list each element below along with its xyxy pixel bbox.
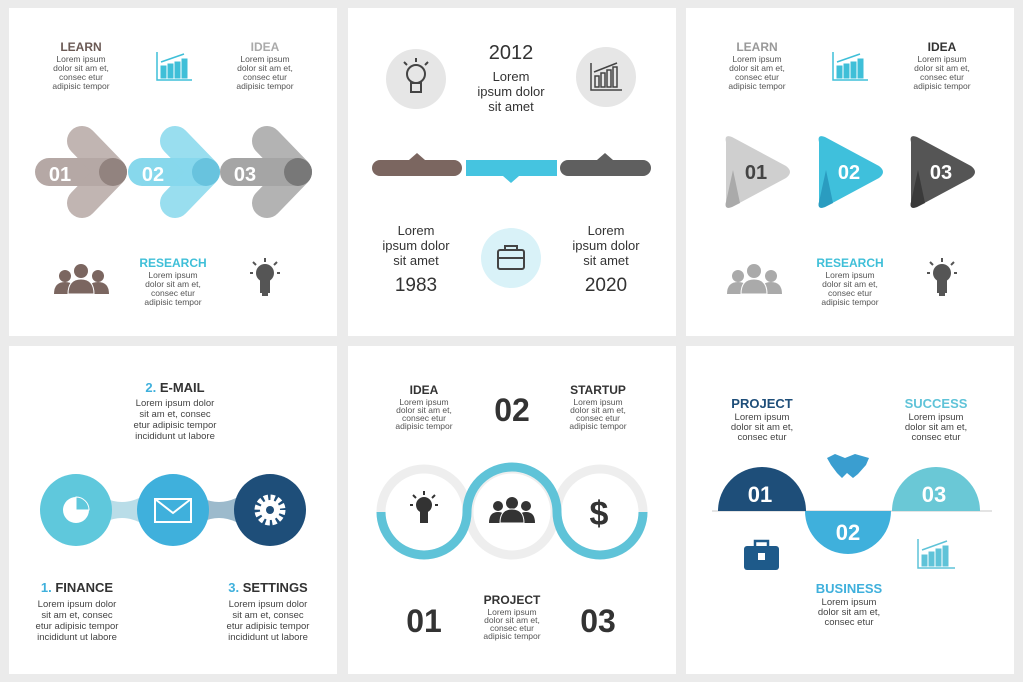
timeline bars <box>372 153 651 183</box>
text: learn: LEARN <box>736 40 778 54</box>
text: settings: sit am et, consec <box>232 610 304 621</box>
semicircle 02 <box>805 511 891 554</box>
text: idea: IDEA <box>410 383 439 397</box>
text: 1983: Lorem <box>398 223 434 238</box>
text: business: BUSINESS <box>816 581 883 596</box>
panel: timeline <box>348 8 676 336</box>
text: idea: IDEA <box>928 40 957 54</box>
text: idea: dolor sit am et, <box>396 405 452 415</box>
icon: handshake <box>827 454 869 478</box>
icon: bulb <box>410 491 438 523</box>
text: business: dolor sit am et, <box>818 607 880 618</box>
text: 1983: ipsum dolor <box>382 238 450 253</box>
text: email: 2. E-MAIL <box>145 380 205 395</box>
text: 2020: ipsum dolor <box>572 238 640 253</box>
text: learn <box>728 40 786 91</box>
icon: chart <box>157 52 192 80</box>
text: idea: consec etur <box>243 72 287 82</box>
text: 2020: Lorem <box>588 223 624 238</box>
text: startup: consec etur <box>576 413 620 423</box>
text: finance <box>36 580 118 643</box>
semicircle 03 <box>892 467 980 511</box>
text: learn: Lorem ipsum <box>56 54 106 64</box>
semicircle 02: 02 <box>836 520 860 545</box>
number 02: 02 <box>494 392 530 428</box>
text: project: dolor sit am et, <box>484 615 540 625</box>
triangle 02: 02 <box>838 162 860 184</box>
text: research <box>816 256 884 307</box>
text: startup: Lorem ipsum <box>573 397 623 407</box>
text: business: Lorem ipsum <box>822 597 877 608</box>
text: 2020 <box>572 223 640 296</box>
text: finance: Lorem ipsum dolor <box>38 599 116 610</box>
arrow 01 <box>35 141 127 203</box>
circle: finance <box>40 474 112 546</box>
semicircle 03: 03 <box>922 482 946 507</box>
text: research: dolor sit am et, <box>145 279 201 289</box>
triangle 01 <box>726 136 790 208</box>
text: email: etur adipisic tempor <box>134 420 216 431</box>
text: project: PROJECT <box>484 593 541 607</box>
text: learn: consec etur <box>735 72 779 82</box>
text: research: Lorem ipsum <box>148 270 198 280</box>
text: learn: adipisic tempor <box>728 81 786 91</box>
text: settings: incididunt ut labore <box>228 632 308 643</box>
text: startup: STARTUP <box>570 383 626 397</box>
text: business <box>816 581 883 628</box>
text: startup: adipisic tempor <box>569 421 627 431</box>
text: settings: Lorem ipsum dolor <box>229 599 307 610</box>
text: finance: incididunt ut labore <box>37 632 117 643</box>
triangle 02 <box>819 136 883 208</box>
text: idea: consec etur <box>402 413 446 423</box>
icon: chart <box>918 539 955 568</box>
baseline <box>712 510 992 512</box>
text: 2012: 2012 <box>489 42 533 64</box>
circle: email <box>137 474 209 546</box>
text: research: Lorem ipsum <box>825 270 875 280</box>
text: research <box>139 256 207 307</box>
number 03: 03 <box>580 603 616 639</box>
semicircle 01 <box>718 467 806 511</box>
icon: people <box>489 497 535 523</box>
text: success <box>905 396 968 443</box>
text: success: consec etur <box>911 432 961 443</box>
text: startup <box>569 383 627 431</box>
text: idea <box>236 40 294 91</box>
text: startup: dolor sit am et, <box>570 405 626 415</box>
text: success: dolor sit am et, <box>905 422 967 433</box>
text: 2012: ipsum dolor <box>477 84 545 99</box>
text: research: adipisic tempor <box>144 297 202 307</box>
text: finance: 1. FINANCE <box>41 580 113 595</box>
text: idea <box>395 383 453 431</box>
panel: arrows 1 <box>9 8 337 336</box>
text: finance: etur adipisic tempor <box>36 621 118 632</box>
text: settings <box>227 580 309 643</box>
text: idea: dolor sit am et, <box>237 63 293 73</box>
text: research: RESEARCH <box>816 256 884 270</box>
text: idea: adipisic tempor <box>913 81 971 91</box>
icon: bulb <box>250 258 280 296</box>
text: project <box>483 593 541 641</box>
connectors <box>105 498 236 522</box>
text: project: Lorem ipsum <box>735 412 790 423</box>
triangle 03: 03 <box>930 162 952 184</box>
text: 1983: 1983 <box>395 275 437 296</box>
icon: bulb <box>927 258 957 296</box>
text: success: Lorem ipsum <box>909 412 964 423</box>
text: settings: 3. SETTINGS <box>228 580 308 595</box>
text: learn: dolor sit am et, <box>729 63 785 73</box>
arrow 03 <box>220 141 312 203</box>
text: 1983: sit amet <box>393 253 439 268</box>
text: learn: consec etur <box>59 72 103 82</box>
text: learn <box>52 40 110 91</box>
panel: semicircles <box>686 346 1014 674</box>
text: idea: dolor sit am et, <box>914 63 970 73</box>
text: 1983 <box>382 223 450 296</box>
icon: chart circle <box>576 47 636 107</box>
arrow 02 <box>128 141 220 203</box>
icon: bulb circle <box>386 49 446 109</box>
text: research: dolor sit am et, <box>822 279 878 289</box>
text: research: consec etur <box>151 288 195 298</box>
rings <box>381 467 643 555</box>
icon: people <box>727 264 782 294</box>
text: research: consec etur <box>828 288 872 298</box>
text: 2020: sit amet <box>583 253 629 268</box>
text: project: consec etur <box>737 432 787 443</box>
text: email: incididunt ut labore <box>135 431 215 442</box>
text: research: RESEARCH <box>139 256 207 270</box>
icon: briefcase circle <box>481 228 541 288</box>
text: idea: IDEA <box>251 40 280 54</box>
text: project: PROJECT <box>731 396 793 411</box>
text: business: consec etur <box>824 617 874 628</box>
text: research: adipisic tempor <box>821 297 879 307</box>
text: project <box>731 396 793 443</box>
icon: briefcase <box>744 541 779 570</box>
arrow 02: 02 <box>142 164 164 186</box>
text: idea: adipisic tempor <box>395 421 453 431</box>
semicircle 01: 01 <box>748 482 772 507</box>
text: 2012: sit amet <box>488 99 534 114</box>
icon: people <box>54 264 109 294</box>
text: learn: Lorem ipsum <box>732 54 782 64</box>
text: learn: dolor sit am et, <box>53 63 109 73</box>
text: learn: adipisic tempor <box>52 81 110 91</box>
triangle 03 <box>911 136 975 208</box>
text: settings: etur adipisic tempor <box>227 621 309 632</box>
text: idea: adipisic tempor <box>236 81 294 91</box>
panel: triangles <box>686 8 1014 336</box>
text: email: sit am et, consec <box>139 409 211 420</box>
text: idea: Lorem ipsum <box>917 54 967 64</box>
text: learn: LEARN <box>60 40 102 54</box>
text: 2012: Lorem <box>493 69 529 84</box>
icon: dollar: $ <box>590 495 609 533</box>
text: 2020: 2020 <box>585 275 627 296</box>
arrow 03: 03 <box>234 164 256 186</box>
text: 2012 <box>477 42 545 114</box>
panel: circles chain <box>9 346 337 674</box>
text: idea: consec etur <box>920 72 964 82</box>
text: idea: Lorem ipsum <box>240 54 290 64</box>
text: project: Lorem ipsum <box>487 607 537 617</box>
icon: chart <box>833 52 868 80</box>
text: success: SUCCESS <box>905 396 968 411</box>
text: email <box>134 380 216 442</box>
arrow 01: 01 <box>49 164 71 186</box>
text: project: adipisic tempor <box>483 631 541 641</box>
text: idea: Lorem ipsum <box>399 397 449 407</box>
text: finance: sit am et, consec <box>41 610 113 621</box>
circle: settings <box>234 474 306 546</box>
text: email: Lorem ipsum dolor <box>136 398 214 409</box>
text: idea <box>913 40 971 91</box>
number 01: 01 <box>406 603 442 639</box>
text: project: consec etur <box>490 623 534 633</box>
panel: wave rings <box>348 346 676 674</box>
triangle 01: 01 <box>745 162 767 184</box>
text: project: dolor sit am et, <box>731 422 793 433</box>
